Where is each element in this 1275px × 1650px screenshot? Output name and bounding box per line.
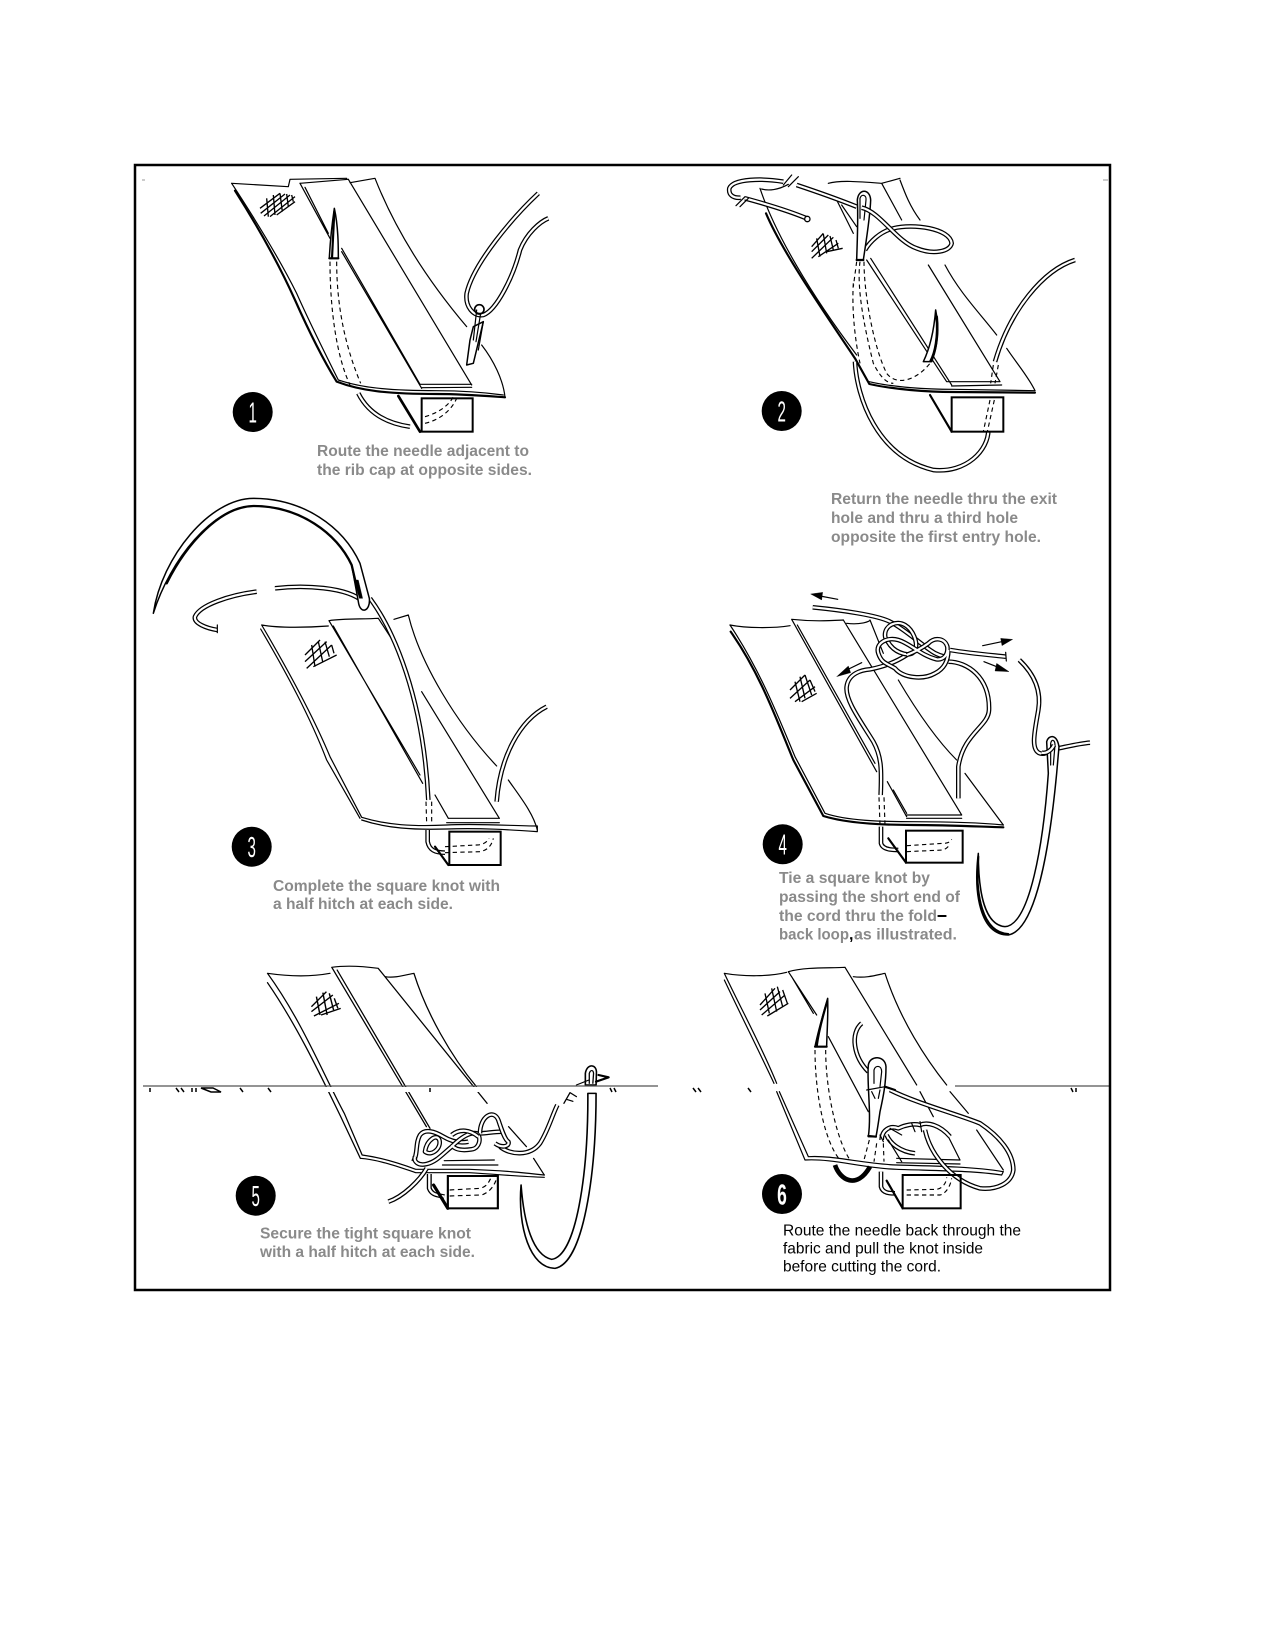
icon: fabric mesh xyxy=(305,640,337,668)
caption: step 4: Tie a square knot by xyxy=(779,870,930,887)
illustration: step 2 return through exit hole xyxy=(729,175,1075,470)
panel: step 2 xyxy=(729,175,1075,546)
caption: step 5 xyxy=(259,1225,475,1261)
caption: step 5: Secure the tight square knot xyxy=(260,1225,472,1242)
caption: step 2: opposite the first entry hole. xyxy=(831,529,1041,546)
panel: step 6 xyxy=(724,967,1021,1276)
icon: fabric mesh xyxy=(790,675,817,702)
arrows: pull directions xyxy=(811,592,1013,677)
caption: step 6 xyxy=(783,1223,1021,1276)
illustration: step 4 tie square knot xyxy=(730,592,1090,935)
caption: step 4: back loop xyxy=(779,926,849,944)
badge: number 3: 3 xyxy=(248,831,256,863)
badge: number 4 xyxy=(763,824,803,864)
square knot with half hitches xyxy=(388,1105,557,1202)
frame border xyxy=(135,165,1110,1290)
caption: step 4 xyxy=(779,870,961,944)
artifact: horizontal scan line xyxy=(136,1086,1110,1092)
caption: step 5: with a half hitch at each side. xyxy=(259,1244,475,1261)
caption: step 6: fabric and pull the knot inside xyxy=(783,1240,983,1258)
panel: step 5 xyxy=(136,966,1110,1268)
caption: step 2: Return the needle thru the exit xyxy=(831,491,1058,508)
illustration: step 3 half hitch xyxy=(153,498,547,865)
cord and needle eye xyxy=(466,193,548,365)
icon: fabric mesh xyxy=(311,992,341,1016)
cord through needle xyxy=(195,587,428,800)
illustration: step 6 pull knot inside xyxy=(724,967,1013,1208)
panel: step 4 xyxy=(730,592,1090,944)
caption: step 2: hole and thru a third hole xyxy=(831,510,1018,527)
icon: big needle xyxy=(520,1093,596,1268)
badge: number 4: 4 xyxy=(779,828,787,861)
icon: needle tip xyxy=(329,208,338,258)
badge: number 1 xyxy=(233,392,273,432)
caption: step 2 xyxy=(831,491,1058,546)
badge: number 5 xyxy=(236,1176,276,1216)
caption: step 4: , xyxy=(849,926,853,944)
panel: step 1 xyxy=(232,178,548,479)
icon: first needle tip xyxy=(815,998,828,1047)
badge: number 2 xyxy=(762,391,802,431)
cord, needle and knot xyxy=(855,1023,1013,1189)
caption: step 4: the cord thru the fold xyxy=(779,908,937,925)
icon: fabric mesh xyxy=(760,987,788,1016)
caption: step 3 xyxy=(273,878,500,913)
badge: number 2: 2 xyxy=(778,395,786,428)
badge: number 3 xyxy=(232,827,272,867)
illustration: step 1 needle through rib cap xyxy=(232,178,548,432)
badge: number 5: 5 xyxy=(252,1180,260,1212)
badge: number 6 xyxy=(762,1174,802,1214)
caption: step 1: Route the needle adjacent to xyxy=(317,443,529,460)
icon: big curved needle xyxy=(153,498,369,613)
caption: step 4: passing the short end of xyxy=(779,889,961,906)
icon: fabric mesh xyxy=(812,233,843,258)
icon: big needle with cord xyxy=(977,660,1090,935)
icon: curved needle tip xyxy=(923,310,938,362)
badge: number 6: 6 xyxy=(777,1179,787,1212)
caption: step 3: Complete the square knot with xyxy=(273,878,500,895)
illustration: step 5 secure knot xyxy=(267,966,609,1268)
caption: step 1: the rib cap at opposite sides. xyxy=(317,462,532,479)
caption: step 3: a half hitch at each side. xyxy=(273,896,453,913)
caption: step 4: as illustrated. xyxy=(854,926,957,944)
icon: fabric mesh xyxy=(260,193,295,217)
badge: number 1: 1 xyxy=(249,396,257,429)
caption: step 6: before cutting the cord. xyxy=(783,1259,941,1276)
caption: step 6: Route the needle back through the xyxy=(783,1223,1021,1240)
panel: step 3 xyxy=(153,498,547,913)
cord and needle with eye xyxy=(729,175,952,260)
caption: step 1 xyxy=(317,443,532,479)
square knot xyxy=(813,607,1006,798)
